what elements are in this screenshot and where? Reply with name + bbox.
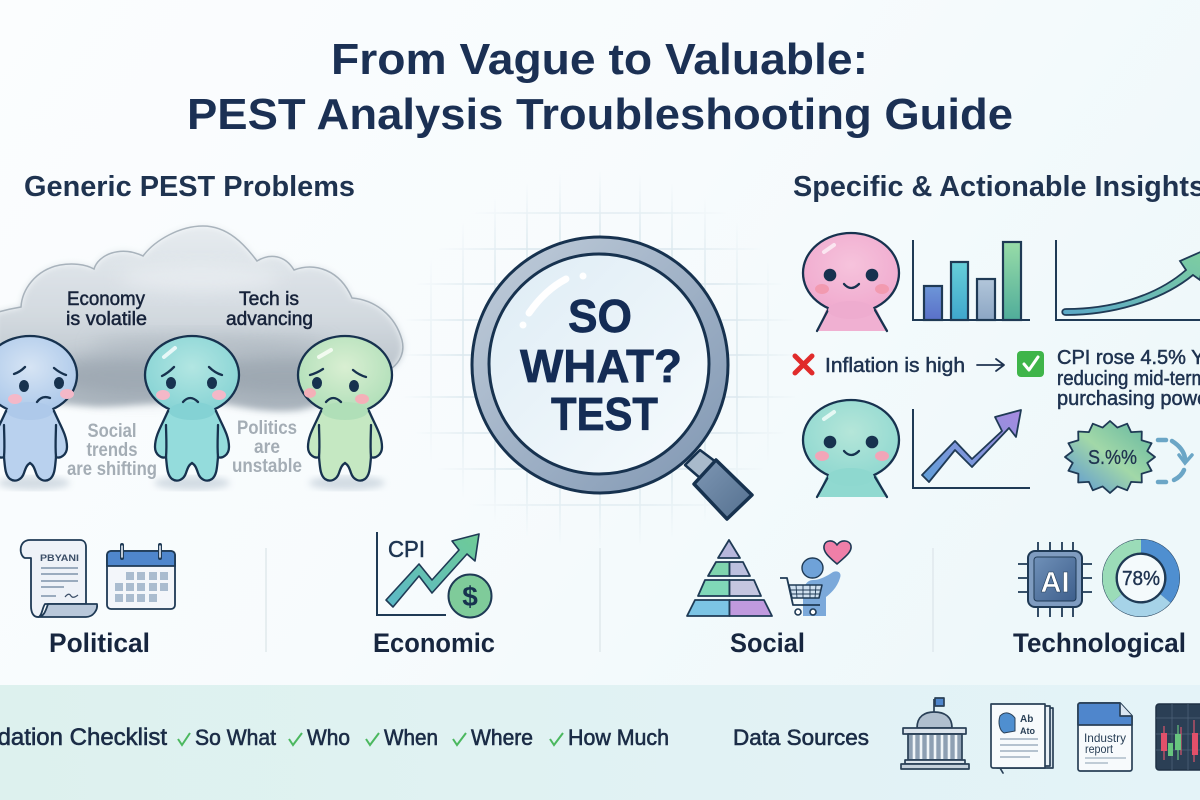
icon: CPI chart: $ xyxy=(462,581,478,612)
arrow: vague to specific xyxy=(977,359,1004,371)
icon: 78% donut chart xyxy=(1102,539,1180,617)
icon: 78% donut chart: 78% xyxy=(1122,568,1160,590)
title: PEST Analysis Troubleshooting Guide xyxy=(187,90,1013,139)
icon: policy scroll xyxy=(21,540,97,617)
vague statement: Inflation is high xyxy=(825,355,965,377)
panel: economic xyxy=(373,532,495,658)
magnifying glass: so what test xyxy=(472,237,752,519)
faded label: politics are unstable: are xyxy=(254,437,280,458)
panel: specific insights xyxy=(795,233,1200,497)
growth curve chart xyxy=(1056,240,1200,320)
icon: calendar xyxy=(107,545,175,609)
icon: market candlestick screen xyxy=(1156,704,1200,770)
storm cloud xyxy=(0,226,403,411)
icon: AI chip xyxy=(1018,542,1092,617)
title xyxy=(187,35,1013,139)
magnifier text: TEST xyxy=(551,388,658,440)
cloud label: economy is volatile: is volatile xyxy=(66,309,147,330)
zigzag trend chart xyxy=(913,409,1030,488)
check icon xyxy=(1017,351,1044,377)
panel: political xyxy=(21,540,175,658)
happy character: mint xyxy=(803,400,899,497)
icon: industry report xyxy=(1078,703,1132,771)
icon: news article xyxy=(991,704,1053,773)
magnifier text: SO xyxy=(568,290,632,342)
icon: consumer with cart and heart xyxy=(780,541,851,616)
faded label: politics are unstable: Politics xyxy=(237,418,297,439)
faded label: social trends are shifting xyxy=(67,421,157,480)
icon: news article: Ab xyxy=(1020,714,1033,725)
validation checklist xyxy=(0,724,669,751)
dashed cycle arrow xyxy=(1158,440,1192,482)
icon: news article: Ato xyxy=(1020,726,1035,736)
percentage badge: S.%% xyxy=(1088,447,1137,469)
background grid behind magnifier xyxy=(418,186,781,532)
label: political: Political xyxy=(49,628,150,658)
validation checklist: When xyxy=(384,725,438,750)
cloud label: economy is volatile xyxy=(66,289,147,330)
validation checklist: Where xyxy=(471,725,533,750)
cloud label: economy is volatile: Economy xyxy=(67,289,145,310)
icon: social pyramid xyxy=(687,540,772,616)
specific statement xyxy=(1057,347,1200,410)
happy character: pink xyxy=(803,233,899,331)
label: technological: Technological xyxy=(1013,628,1186,658)
panel: generic problems illustration xyxy=(0,226,403,490)
icon: government building xyxy=(901,698,969,769)
faded label: social trends are shifting: are shifting xyxy=(67,459,157,480)
sad character: green xyxy=(298,336,392,490)
cloud label: tech is advancing: advancing xyxy=(226,309,313,330)
cloud label: tech is advancing: Tech is xyxy=(239,289,299,310)
panel: social xyxy=(687,540,851,658)
bottom band xyxy=(0,685,1200,800)
icon: CPI chart: CPI xyxy=(388,536,425,562)
sad character: blue xyxy=(0,336,77,490)
panel: technological xyxy=(1013,539,1186,658)
icon: CPI chart xyxy=(377,532,492,618)
heading: generic PEST problems: Generic PEST Problems xyxy=(24,171,355,203)
label: social: Social xyxy=(730,628,805,658)
faded label: politics are unstable: unstable xyxy=(232,456,302,477)
magnifier ring xyxy=(472,237,728,493)
magnifier text: WHAT? xyxy=(520,340,682,392)
icon: industry report: Industry xyxy=(1084,731,1126,745)
percentage badge xyxy=(1065,421,1155,493)
faded label: social trends are shifting: trends xyxy=(86,440,138,461)
magnifier text xyxy=(520,290,682,440)
lens highlight xyxy=(520,272,586,328)
bar chart xyxy=(913,240,1030,320)
icon: industry report: report xyxy=(1085,742,1114,756)
faded label: politics are unstable xyxy=(232,418,302,477)
label: economic: Economic xyxy=(373,628,495,658)
icon: AI chip: AI xyxy=(1040,567,1070,599)
data sources label: Data Sources xyxy=(733,725,869,750)
validation checklist: Who xyxy=(307,725,350,750)
magnifier lens xyxy=(489,254,709,474)
title: From Vague to Valuable: xyxy=(331,35,868,84)
validation checklist: So What xyxy=(195,725,276,750)
cross icon xyxy=(795,356,812,373)
faded label: social trends are shifting: Social xyxy=(88,421,136,442)
sad character: teal xyxy=(145,336,239,490)
icon: policy scroll: PBYANI xyxy=(40,553,79,563)
heading: specific and actionable insights: Specific & Actionable Insights xyxy=(793,171,1200,203)
cloud label: tech is advancing xyxy=(226,289,313,330)
validation checklist: How Much xyxy=(568,725,669,750)
magnifier handle xyxy=(685,450,752,519)
